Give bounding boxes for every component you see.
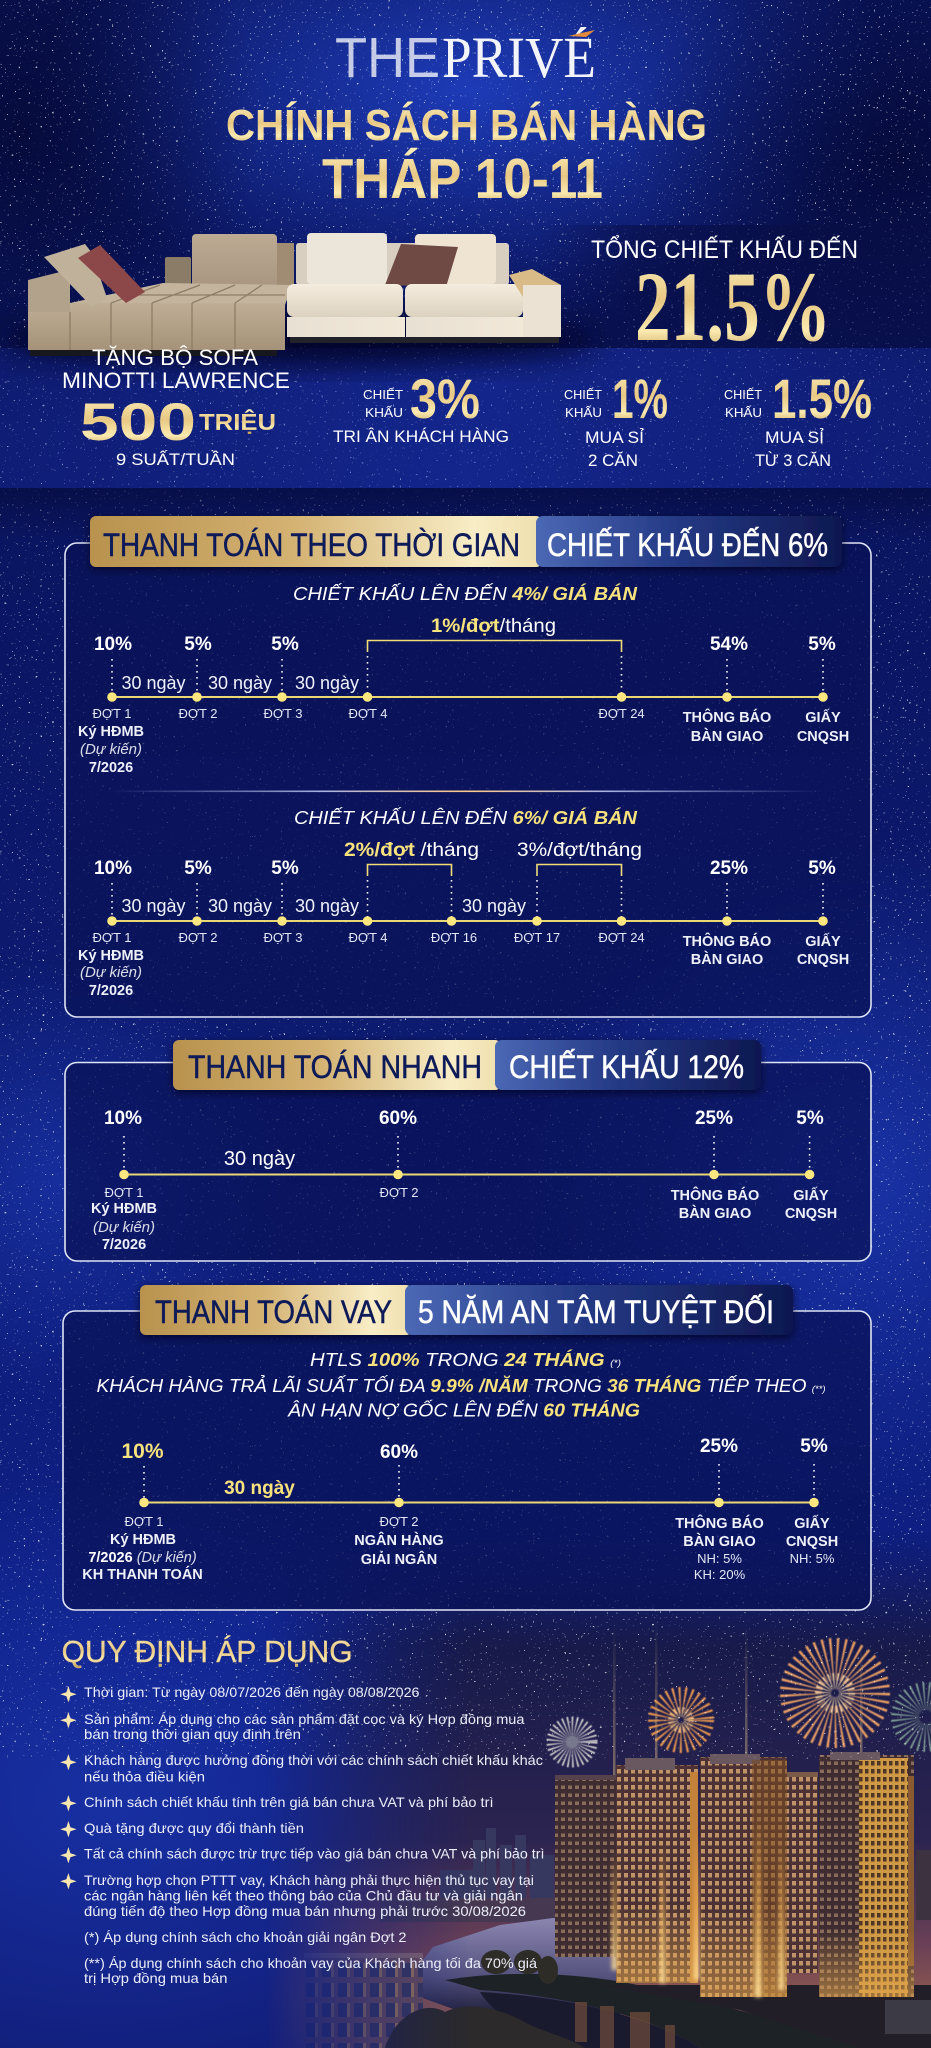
timeline: 6% plan: 30 ngày: [462, 896, 526, 916]
rules text: trị Hợp đồng mua bán: [84, 1970, 228, 1986]
discount 1%: KHẤU: [565, 405, 602, 420]
timeline: fast payment: THÔNG BÁO: [671, 1186, 759, 1204]
timeline: loan payment: 7/2026 (Dự kiến): [88, 1550, 197, 1566]
timeline: 4% plan: 30 ngày: [121, 673, 186, 693]
timeline: 4% plan: (Dự kiến): [80, 741, 142, 758]
trees at tower base: [481, 1950, 558, 1984]
discount band: [0, 225, 931, 538]
timeline: 4% plan: [78, 616, 849, 776]
timeline: 6% plan: 30 ngày: [121, 896, 186, 916]
timeline: loan payment: NGÂN HÀNG: [354, 1531, 444, 1549]
timeline: 4% plan: Ký HĐMB: [78, 724, 144, 740]
timeline: loan payment: NH: 5%: [790, 1551, 835, 1566]
logo: The Privé: PRIVÉ: [442, 25, 596, 90]
discount 1%: CHIẾT: [564, 387, 602, 402]
heading: Quy định áp dụng: QUY ĐỊNH ÁP DỤNG: [62, 1634, 353, 1669]
logo: The Privé: THE: [335, 26, 440, 90]
timeline: loan payment: GIẢI NGÂN: [361, 1550, 437, 1568]
discount 3%: TRI ÂN KHÁCH HÀNG: [333, 427, 509, 446]
timeline: 6% plan: GIẤY: [805, 933, 841, 950]
timeline: loan payment: BÀN GIAO: [683, 1533, 756, 1550]
firework: green: [905, 1696, 931, 1738]
timeline: 4% plan: ĐỢT 3: [263, 706, 303, 721]
heading pill: loan payment: THANH TOÁN VAY: [155, 1294, 392, 1330]
timeline: fast payment: 30 ngày: [224, 1148, 295, 1170]
timeline: 6% plan: 7/2026: [89, 983, 133, 999]
heading pill: schedule payment: THANH TOÁN THEO THỜI GIAN: [103, 527, 520, 563]
discount 3%: KHẤU: [365, 405, 403, 420]
subheading: 6% plan: CHIẾT KHẤU LÊN ĐẾN 6%/ GIÁ BÁN: [294, 807, 638, 828]
subheading: 4% plan: CHIẾT KHẤU LÊN ĐẾN 4%/ GIÁ BÁN: [293, 583, 638, 604]
timeline: loan payment: NH: 5%: [697, 1551, 742, 1566]
tower light strips: [612, 1820, 784, 1997]
timeline: 6% plan: ĐỢT 1: [92, 930, 132, 945]
timeline: 6% plan: 25%: [710, 858, 748, 879]
timeline: 6% plan: 5%: [808, 858, 836, 879]
rules text: đúng tiến độ theo Hợp đồng mua bán nhưng phải trước 30/08/2026: [84, 1903, 526, 1919]
timeline: loan payment: [82, 1436, 838, 1583]
bullet stars: [60, 1686, 77, 1889]
beams: [613, 1620, 862, 1775]
rules text: Chính sách chiết khấu tính trên giá bán chưa VAT và phí bảo trì: [84, 1794, 494, 1810]
timeline: 6% plan: ĐỢT 24: [598, 930, 645, 945]
timeline: 6% plan: ĐỢT 17: [514, 930, 560, 945]
timeline: fast payment: BÀN GIAO: [679, 1205, 751, 1222]
timeline: 4% plan: 54%: [710, 634, 748, 655]
timeline: 4% plan: 7/2026: [89, 760, 133, 776]
tower C: [700, 1754, 787, 1997]
discount 1.5%: CHIẾT: [724, 387, 762, 402]
timeline: fast payment: 25%: [695, 1108, 733, 1129]
timeline: 6% plan: ĐỢT 16: [431, 930, 477, 945]
discount 3%: 3%: [410, 367, 480, 430]
logo: The Privé: [335, 25, 596, 90]
rules text: Trường hợp chọn PTTT vay, Khách hàng phải thực hiện thủ tục vay tại: [84, 1872, 534, 1888]
timeline: 6% plan: BÀN GIAO: [691, 951, 763, 968]
rules text: (*) Áp dụng chính sách cho khoản giải ngân Đợt 2: [84, 1929, 407, 1945]
illustration: towers and fireworks at night: [260, 1530, 931, 2048]
timeline: 6% plan: 30 ngày: [208, 896, 272, 916]
timeline: 6% plan: 3%/đợt/tháng: [517, 840, 642, 861]
discount 1%: 2 CĂN: [588, 451, 638, 470]
discount 1%: [564, 367, 668, 470]
timeline: loan payment: ĐỢT 1: [124, 1514, 164, 1529]
total discount 21.5%: [591, 234, 858, 362]
timeline: 4% plan: 10%: [94, 634, 132, 655]
timeline: loan payment: Ký HĐMB: [110, 1532, 176, 1548]
discount 1%: MUA SỈ: [585, 428, 644, 447]
gift: sofa 500 triệu: MINOTTI LAWRENCE: [62, 368, 290, 393]
heading pill: fast payment: CHIẾT KHẤU 12%: [509, 1049, 744, 1085]
timeline: 6% plan: ĐỢT 4: [348, 930, 388, 945]
rules text: [84, 1684, 544, 1986]
timeline: fast payment: 10%: [104, 1108, 142, 1129]
gift: sofa 500 triệu: 500: [80, 393, 196, 452]
discount 3%: [333, 367, 509, 446]
timeline: 4% plan: 1%/đợt/tháng: [431, 616, 556, 637]
timeline: loan payment: 25%: [700, 1436, 738, 1457]
timeline: 4% plan: 30 ngày: [208, 673, 272, 693]
timeline: fast payment: GIẤY: [793, 1187, 829, 1204]
timeline: loan payment: KH: 20%: [694, 1567, 746, 1582]
right ground: [638, 1985, 931, 2048]
timeline: loan payment: KH THANH TOÁN: [82, 1566, 203, 1583]
panel: payment by schedule: [65, 516, 871, 1017]
rules text: các ngân hàng liên kết theo thông báo của Chủ đầu tư và giải ngân: [84, 1888, 523, 1904]
loan terms text: ÂN HẠN NỢ GỐC LÊN ĐẾN 60 THÁNG: [287, 1400, 640, 1420]
timeline: 6% plan: CNQSH: [797, 952, 849, 968]
tower B: [616, 1758, 698, 1983]
timeline: 4% plan: 5%: [808, 634, 836, 655]
discount 1.5%: KHẤU: [725, 405, 762, 420]
gift: sofa 500 triệu: [62, 345, 290, 469]
loan terms text: HTLS 100% TRONG 24 THÁNG (*): [310, 1349, 621, 1370]
title: [226, 100, 707, 211]
timeline: 4% plan: ĐỢT 2: [178, 706, 218, 721]
loan terms text: KHÁCH HÀNG TRẢ LÃI SUẤT TỐI ĐA 9.9% /NĂM TRONG 36 THÁNG TIẾP THEO (**): [96, 1375, 826, 1396]
timeline: fast payment: (Dự kiến): [93, 1219, 155, 1236]
timeline: 4% plan: 5%: [184, 634, 212, 655]
timeline: 4% plan: BÀN GIAO: [691, 728, 763, 745]
rules text: Sản phẩm: Áp dụng cho các sản phẩm đặt cọc và ký Hợp đồng mua: [84, 1711, 525, 1727]
discount 1.5%: TỪ 3 CĂN: [755, 451, 831, 470]
timeline: loan payment: GIẤY: [794, 1515, 830, 1532]
timeline: 4% plan: ĐỢT 4: [348, 706, 388, 721]
timeline: 6% plan: THÔNG BÁO: [683, 932, 771, 950]
tower A: [555, 1775, 616, 1957]
discount 1.5%: MUA SỈ: [765, 428, 824, 447]
timeline: 6% plan: Ký HĐMB: [78, 948, 144, 964]
timeline: 6% plan: ĐỢT 3: [263, 930, 303, 945]
timeline: 6% plan: ĐỢT 2: [178, 930, 218, 945]
rules text: (**) Áp dụng chính sách cho khoản vay của Khách hàng tối đa 70% giá: [84, 1955, 537, 1971]
title: CHÍNH SÁCH BÁN HÀNG: [226, 100, 707, 150]
discount 1.5%: 1.5%: [772, 367, 872, 430]
foreground building: [304, 1953, 423, 2048]
timeline: loan payment: 60%: [380, 1442, 418, 1463]
discount 3%: CHIẾT: [363, 387, 403, 402]
riverbank: [445, 1974, 870, 2048]
timeline: loan payment: CNQSH: [786, 1534, 838, 1550]
timeline: loan payment: THÔNG BÁO: [675, 1514, 764, 1532]
heading pill: fast payment: THANH TOÁN NHANH: [188, 1049, 482, 1085]
illustration: Minotti sofa: [0, 233, 600, 366]
timeline: loan payment: 5%: [800, 1436, 828, 1457]
discount 1%: 1%: [612, 367, 668, 430]
timeline: 4% plan: CNQSH: [797, 729, 849, 745]
discount 1.5%: [724, 367, 872, 470]
firework: orange: [661, 1700, 701, 1740]
rules text: nếu thỏa điều kiện: [84, 1768, 205, 1784]
river: [423, 1918, 620, 2014]
rules text: Khách hàng được hưởng đồng thời với các chính sách chiết khấu khác: [84, 1752, 543, 1768]
timeline: 6% plan: 10%: [94, 858, 132, 879]
timeline: fast payment: 5%: [796, 1108, 824, 1129]
rules text: Thời gian: Từ ngày 08/07/2026 đến ngày 08/08/2026: [84, 1684, 420, 1700]
timeline: fast payment: 60%: [379, 1108, 417, 1129]
timeline: 4% plan: ĐỢT 24: [598, 706, 645, 721]
heading pill: schedule payment: CHIẾT KHẤU ĐẾN 6%: [547, 527, 828, 563]
foreground trees: [385, 2007, 585, 2048]
timeline: 4% plan: 5%: [271, 634, 299, 655]
timeline: 6% plan: 5%: [184, 858, 212, 879]
title: THÁP 10-11: [322, 147, 603, 211]
distant skyline: [440, 1828, 554, 1898]
timeline: loan payment: ĐỢT 2: [379, 1514, 419, 1529]
heading pill: loan payment: 5 NĂM AN TÂM TUYỆT ĐỐI: [418, 1294, 774, 1330]
tower C2: [787, 1772, 818, 1973]
gift: sofa 500 triệu: TRIỆU: [199, 408, 276, 435]
timeline: 6% plan: 2%/đợt /tháng: [344, 840, 479, 861]
timeline: fast payment: ĐỢT 2: [379, 1185, 419, 1200]
rules text: Tất cả chính sách được trừ trực tiếp vào giá bán chưa VAT và phí bảo trì: [84, 1846, 544, 1862]
heading pill: schedule payment: [90, 516, 842, 567]
timeline: 6% plan: [78, 840, 849, 999]
timeline: 6% plan: 30 ngày: [295, 896, 359, 916]
loan terms text: [96, 1349, 826, 1420]
total discount 21.5%: 21.5%: [635, 251, 831, 362]
timeline: 4% plan: THÔNG BÁO: [683, 708, 771, 726]
rules text: Quà tặng được quy đổi thành tiền: [84, 1820, 304, 1836]
section: rules: [60, 1634, 544, 1986]
heading pill: loan payment: [140, 1285, 793, 1335]
total discount 21.5%: TỔNG CHIẾT KHẤU ĐẾN: [591, 234, 858, 264]
gift: sofa 500 triệu: TẶNG BỘ SOFA: [92, 345, 258, 370]
rules text: bán trong thời gian quy định trên: [84, 1726, 301, 1742]
timeline: fast payment: Ký HĐMB: [91, 1201, 157, 1217]
timeline: fast payment: [91, 1108, 837, 1253]
heading pill: fast payment: [173, 1040, 761, 1090]
timeline: 4% plan: ĐỢT 1: [92, 706, 132, 721]
firework: white: [557, 1727, 587, 1757]
timeline: 6% plan: (Dự kiến): [80, 964, 142, 981]
timeline: loan payment: 30 ngày: [224, 1478, 295, 1499]
tower D: [819, 1752, 914, 1997]
timeline: 6% plan: 5%: [271, 858, 299, 879]
gift: sofa 500 triệu: 9 SUẤT/TUẦN: [116, 450, 235, 469]
timeline: 4% plan: GIẤY: [805, 709, 841, 726]
firework: large gold: [801, 1659, 869, 1727]
timeline: 4% plan: 30 ngày: [295, 673, 359, 693]
timeline: fast payment: CNQSH: [785, 1206, 837, 1222]
panel: loan payment: [63, 1285, 871, 1610]
timeline: fast payment: ĐỢT 1: [104, 1185, 144, 1200]
panel: fast payment: [65, 1040, 871, 1261]
timeline: fast payment: 7/2026: [102, 1237, 146, 1253]
water with reflections: [480, 1992, 700, 2048]
timeline: loan payment: 10%: [121, 1440, 164, 1463]
